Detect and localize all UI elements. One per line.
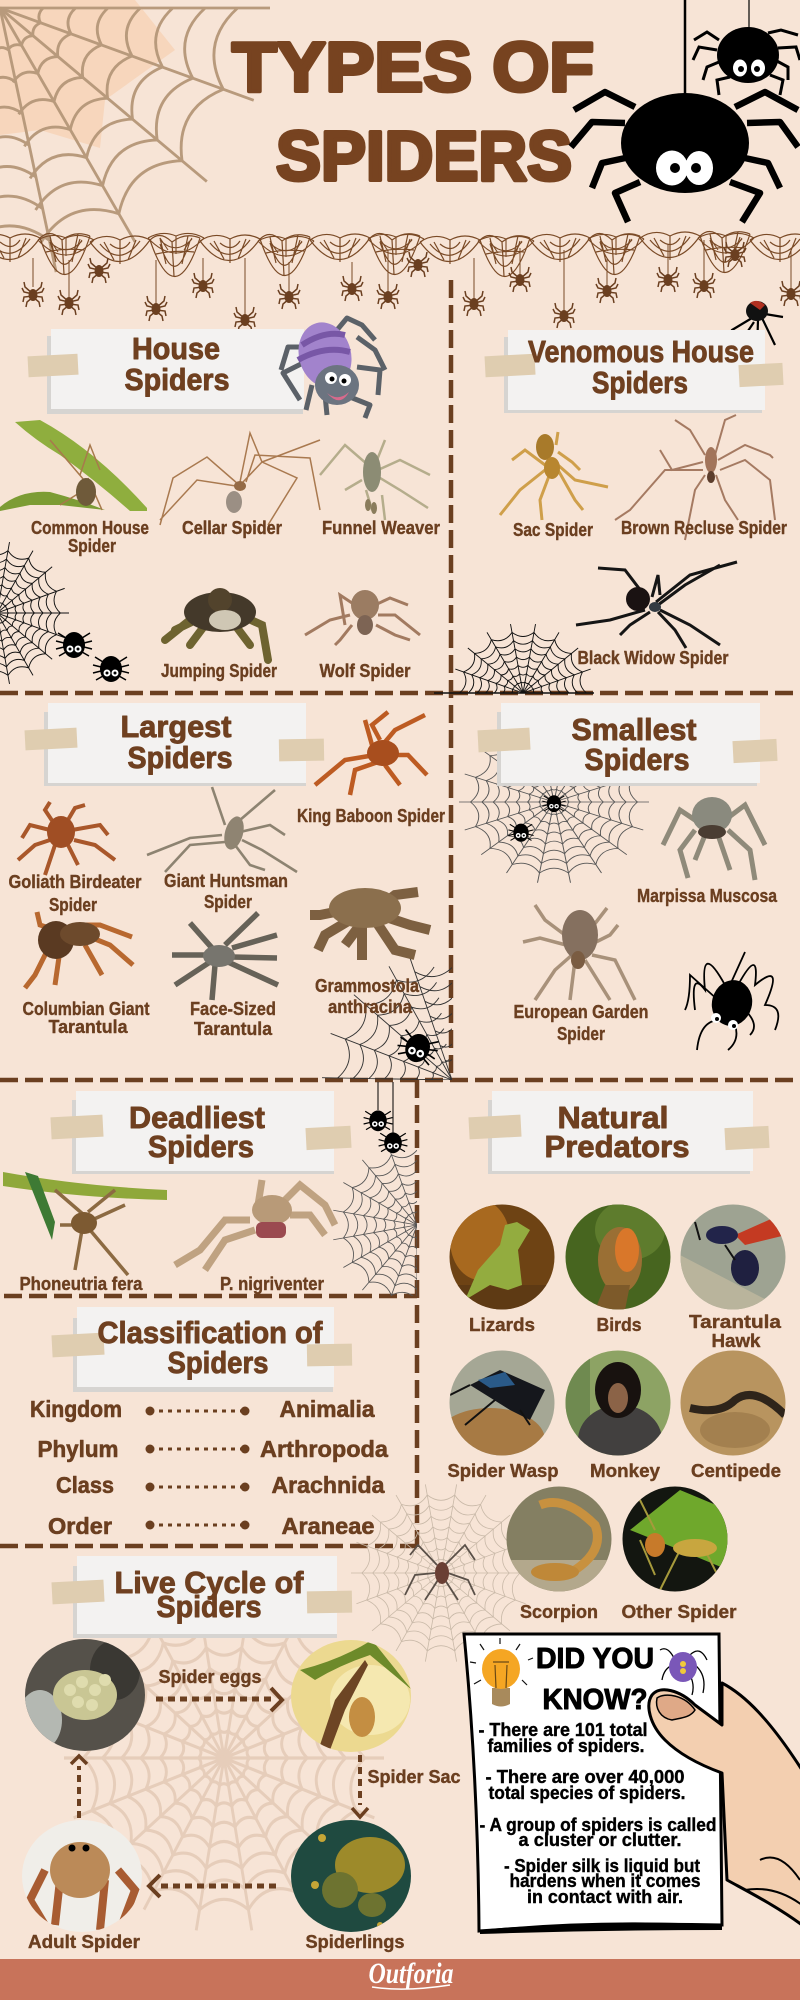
row: class: [56, 1472, 385, 1498]
predator: scorpion: [506, 1486, 612, 1622]
card: black widow spider: Black Widow Spider: [578, 648, 728, 668]
card: marpissa muscosa: [637, 797, 778, 906]
card: columbian giant tarantula: Columbian Giant: [22, 999, 150, 1019]
icon: purple spider: [660, 1649, 707, 1695]
card: marpissa muscosa: Marpissa Muscosa: [637, 886, 778, 906]
icon: big black spider hanging: [571, 0, 798, 222]
fact: silk: hardens when it comes: [510, 1871, 700, 1891]
predator: scorpion: Scorpion: [520, 1602, 598, 1622]
card: wolf spider: [305, 590, 420, 681]
photo: spider eggs: [25, 1639, 145, 1751]
fact: families: families of spiders.: [488, 1736, 644, 1756]
heading: Largest Spiders: Largest: [120, 709, 232, 744]
label: spider eggs: Spider eggs: [158, 1667, 262, 1687]
card: common house spider: [0, 420, 149, 556]
heading: Largest Spiders: [25, 703, 324, 786]
icon: hand holding note: [649, 1683, 800, 1925]
fact: cluster: a cluster or clutter.: [518, 1830, 682, 1850]
heading: Deadliest Spiders: Spiders: [148, 1129, 254, 1164]
icon: small black spiders: [56, 632, 129, 682]
card: jumping spider: [161, 588, 277, 681]
row: class: Arachnida: [272, 1472, 385, 1498]
heading: House Spiders: House: [132, 331, 220, 366]
row: phylum: Arthropoda: [260, 1436, 388, 1462]
icon: spider on faint web: [405, 1545, 475, 1600]
card: sac spider: [500, 432, 608, 540]
card: cellar spider: Cellar Spider: [182, 518, 282, 538]
panel: natural predators: [435, 1091, 786, 1622]
heading: Classification of Spiders: Classification of: [98, 1315, 323, 1350]
card: brown recluse spider: [615, 415, 787, 540]
heading: Smallest Spiders: Spiders: [584, 742, 690, 777]
paper note: [464, 1634, 722, 1934]
panel: classification of spiders: [30, 1307, 388, 1539]
card: giant huntsman spider: [147, 787, 297, 912]
card: face-sized tarantula: Face-Sized: [190, 999, 276, 1019]
predator: monkey: Monkey: [590, 1461, 660, 1481]
card: goliath birdeater: [8, 802, 142, 915]
card: european garden spider: Spider: [557, 1024, 605, 1044]
icon: outlined cartoon spider: [685, 952, 778, 1050]
predator: centipede: Centipede: [691, 1461, 781, 1481]
icon: small black spider hanging: [693, 0, 800, 95]
heading: Venomous House Spiders: Venomous House: [528, 334, 754, 369]
fact: silk: [504, 1856, 700, 1907]
card: common house spider: Common House: [31, 518, 149, 538]
predator: tarantula hawk: [680, 1204, 786, 1351]
predator: monkey: [565, 1350, 671, 1481]
predator: other spider: Other Spider: [622, 1602, 736, 1622]
heading: Smallest Spiders: Smallest: [572, 712, 696, 747]
fact: species: total species of spiders.: [488, 1783, 686, 1803]
section dividers: [0, 280, 800, 1547]
arrow: eggs to sac: [156, 1688, 282, 1711]
card: european garden spider: European Garden: [514, 1002, 648, 1022]
card: grammostola anthracina: [310, 888, 430, 1017]
predator: tarantula hawk: Tarantula: [689, 1312, 782, 1332]
row: kingdom: Animalia: [280, 1396, 375, 1422]
title: SPIDERS: [276, 117, 572, 195]
row: kingdom: Kingdom: [30, 1396, 122, 1422]
card: king baboon spider: King Baboon Spider: [297, 806, 445, 826]
card: black widow spider: [576, 562, 737, 668]
panel: largest spiders: [8, 703, 445, 1068]
card: cellar spider: [160, 433, 320, 538]
card: p. nigriventer: [175, 1180, 335, 1294]
label: spiderlings: Spiderlings: [306, 1932, 404, 1952]
title: TYPES OF: [232, 28, 594, 106]
row: kingdom: [30, 1396, 375, 1422]
photo: spider sac: [291, 1640, 411, 1752]
heading: Venomous House Spiders: Spiders: [592, 365, 688, 400]
row: phylum: Phylum: [38, 1436, 118, 1462]
card: phoneutria fera: [3, 1172, 167, 1294]
card: giant huntsman spider: Spider: [204, 892, 252, 912]
panel: house spiders: [0, 316, 440, 682]
card: funnel weaver: [320, 440, 440, 538]
arrow: adult to eggs: [71, 1756, 87, 1818]
panel: deadliest spiders: [3, 1082, 407, 1294]
card: jumping spider: Jumping Spider: [161, 661, 277, 681]
icon: spider on corner web: [394, 1028, 441, 1068]
label: spider sac: Spider Sac: [368, 1767, 460, 1787]
heading: Deadliest Spiders: Deadliest: [129, 1100, 265, 1135]
web garland with hanging spiders: [0, 231, 800, 332]
card: funnel weaver: Funnel Weaver: [322, 518, 440, 538]
heading: Live Cycle of Spiders: Live Cycle of: [114, 1565, 304, 1600]
icon: redback spider: [718, 301, 783, 352]
heading: did you know: [536, 1643, 654, 1716]
heading: Smallest Spiders: [477, 703, 778, 786]
fact: cluster: [480, 1815, 716, 1850]
row: order: [48, 1513, 374, 1539]
card: sac spider: Sac Spider: [513, 520, 593, 540]
title: [232, 28, 594, 195]
predator: other spider: [622, 1486, 736, 1622]
row: order: Araneae: [282, 1513, 374, 1539]
icon: lightbulb: [470, 1638, 533, 1706]
card: grammostola anthracina: Grammostola: [315, 976, 420, 996]
heading: Classification of Spiders: [51, 1307, 352, 1392]
footer band: [0, 1957, 800, 2000]
heading: Venomous House Spiders: [485, 330, 784, 413]
predator: centipede: [680, 1350, 786, 1481]
panel: did you know: [464, 1634, 800, 1934]
heading: Natural Predators: Predators: [544, 1129, 690, 1164]
panel: life cycle of spiders: [18, 1556, 460, 1952]
card: columbian giant tarantula: Tarantula: [48, 1017, 128, 1037]
card: common house spider: Spider: [68, 536, 116, 556]
predator: spider wasp: [448, 1350, 558, 1482]
card: giant huntsman spider: Giant Huntsman: [164, 871, 288, 891]
fact: families: [478, 1720, 648, 1756]
label: adult spider: Adult Spider: [28, 1932, 140, 1952]
icon: spiders on web: [508, 795, 566, 842]
row: class: Class: [56, 1472, 114, 1498]
heading: Largest Spiders: Spiders: [128, 740, 232, 775]
photo: spiderlings: [290, 1818, 415, 1934]
predator: birds: [565, 1200, 671, 1335]
decorative black webs: [0, 529, 653, 1961]
fact: families: - There are 101 total: [478, 1720, 648, 1740]
card: king baboon spider: [297, 712, 445, 826]
row: order: Order: [48, 1513, 112, 1539]
card: grammostola anthracina: anthracina: [328, 997, 413, 1017]
fact: silk: in contact with air.: [527, 1887, 683, 1907]
arrow: spiderlings to adult: [149, 1875, 276, 1897]
card: goliath birdeater: Goliath Birdeater: [8, 872, 142, 892]
photo: adult spider: [20, 1818, 145, 1934]
heading: Deadliest Spiders: [50, 1091, 352, 1174]
heading: Natural Predators: Natural: [558, 1100, 668, 1135]
card: face-sized tarantula: Tarantula: [194, 1019, 273, 1039]
card: phoneutria fera: Phoneutria fera: [20, 1274, 143, 1294]
heading: House Spiders: Spiders: [124, 362, 230, 397]
row: phylum: [38, 1436, 388, 1462]
card: european garden spider: [514, 905, 648, 1044]
heading: Classification of Spiders: Spiders: [168, 1345, 268, 1380]
card: wolf spider: Wolf Spider: [320, 661, 410, 681]
panel: venomous house spiders: [485, 301, 787, 668]
logo: Outforia: Outforia: [368, 1957, 454, 1990]
panel: smallest spiders: [477, 703, 778, 1050]
predator: birds: Birds: [596, 1315, 642, 1335]
heading: Natural Predators: [468, 1091, 770, 1174]
icon: hanging spiders: [364, 1082, 407, 1153]
heading: House Spiders: [28, 329, 304, 414]
heading: Live Cycle of Spiders: Spiders: [156, 1589, 262, 1624]
fact: cluster: - A group of spiders is called: [480, 1815, 716, 1835]
card: p. nigriventer: P. nigriventer: [220, 1274, 324, 1294]
predator: lizards: [449, 1200, 555, 1335]
heading: did you know: DID YOU: [536, 1643, 654, 1675]
card: face-sized tarantula: [172, 913, 278, 1039]
predator: tarantula hawk: Hawk: [712, 1331, 762, 1351]
decorative corner web with blotch: [0, 0, 270, 289]
predator: spider wasp: Spider Wasp: [448, 1461, 558, 1481]
fact: species: - There are over 40,000: [486, 1767, 684, 1787]
heading: did you know: KNOW?: [542, 1684, 648, 1716]
heading: Live Cycle of Spiders: [51, 1556, 352, 1638]
icon: purple cartoon spider: [281, 316, 385, 418]
predator: lizards: Lizards: [469, 1315, 535, 1335]
card: columbian giant tarantula: [22, 912, 150, 1037]
card: goliath birdeater: Spider: [49, 895, 97, 915]
fact: species: [486, 1767, 686, 1803]
arrow: sac to spiderlings: [352, 1755, 368, 1817]
fact: silk: - Spider silk is liquid but: [504, 1856, 700, 1876]
